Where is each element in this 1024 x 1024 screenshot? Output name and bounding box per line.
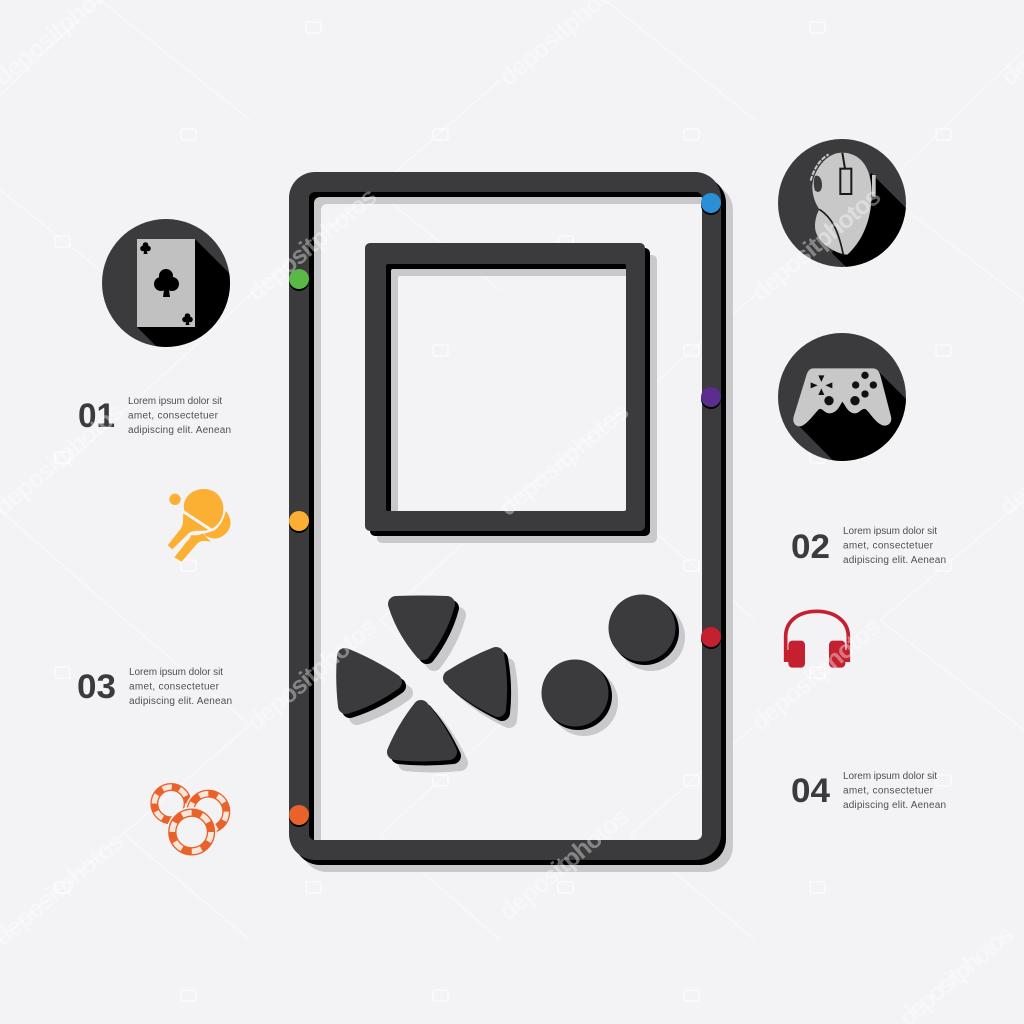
watermark text: depositphotos [242,182,382,307]
text block 02: 02 [791,528,830,566]
connector dots [289,193,721,827]
text block 04: 04 [791,772,830,810]
text block 04: adipiscing elit. Aenean [843,800,946,811]
text block 02 [791,526,946,566]
text block 01: 01 [78,397,115,435]
icon: poker chips [154,787,226,851]
text block 02: adipiscing elit. Aenean [843,555,946,566]
icon: ping pong paddles [168,489,231,562]
text block 01: amet, consectetuer [128,410,219,422]
icon: gamepad [778,333,906,461]
watermark text: depositphotos [242,612,382,737]
text block 04: Lorem ipsum dolor sit [843,771,937,782]
text block 02: amet, consectetuer [843,540,934,552]
device: screen frame [365,243,657,543]
icon: headphones [784,611,849,668]
text block 03: 03 [77,668,116,706]
text block 03: adipiscing elit. Aenean [129,696,232,707]
text block 03: Lorem ipsum dolor sit [129,667,223,678]
text block 03 [77,667,232,707]
text block 01: Lorem ipsum dolor sit [128,396,222,407]
text block 02: Lorem ipsum dolor sit [843,526,937,537]
watermark text: depositphotos [746,612,886,737]
text block 01: adipiscing elit. Aenean [128,425,231,436]
device: handheld console body [289,172,733,872]
icon: computer mouse [778,139,906,267]
device: action buttons [542,594,685,736]
text block 01 [78,396,231,436]
watermark text: depositphotos [494,802,634,927]
watermark text: depositphotos [746,182,886,307]
watermark text: depositphotos [494,397,634,522]
device: directional pad [344,604,510,764]
text block 04 [791,771,946,811]
text block 03: amet, consectetuer [129,682,220,692]
text block 04: amet, consectetuer [843,786,934,796]
icon: playing card [102,219,230,347]
